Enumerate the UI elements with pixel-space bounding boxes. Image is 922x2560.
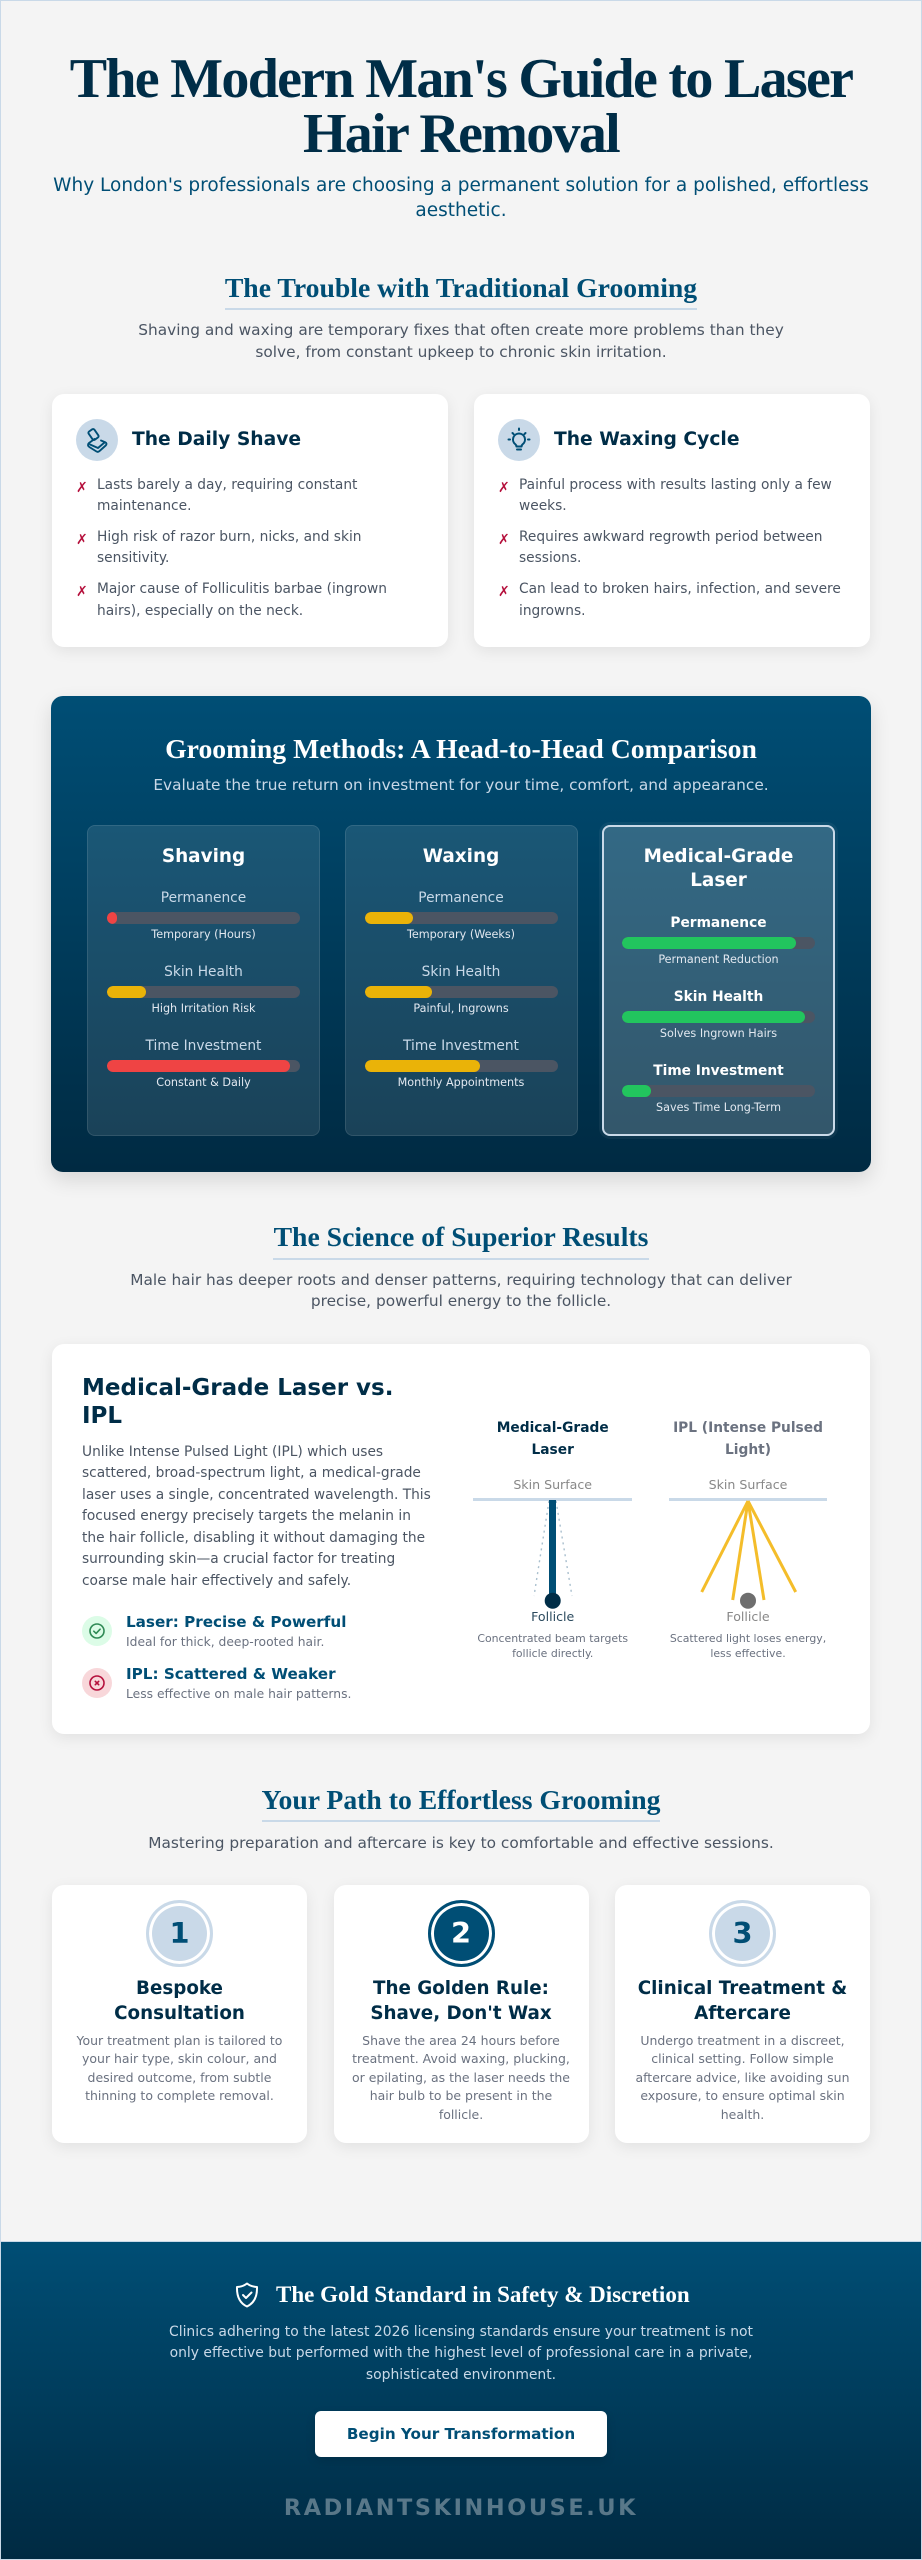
bullet: ✗ [76,480,88,496]
metric: time investment [365,1038,558,1089]
diagram caption: follicle directly. [512,1647,593,1660]
subtitle: aesthetic. [415,200,507,221]
skin surface: Skin Surface [513,1477,592,1492]
metric: skin health: Solves Ingrown Hairs [660,1027,777,1040]
column title: Waxing [423,846,499,866]
bullet: High risk of razor burn, nicks, and skin [97,529,361,545]
step text: treatment. Avoid waxing, plucking, [352,2051,570,2066]
step text: Your treatment plan is tailored to [77,2033,282,2048]
point text [126,1612,346,1648]
bullet: Can lead to broken hairs, infection, and severe [519,581,841,597]
bullet: hairs), especially on the neck. [97,603,303,619]
step title: Shave, Don't Wax [370,2003,552,2024]
point text [126,1664,351,1700]
column title: Laser [690,870,747,891]
footer text: Clinics adhering to the latest 2026 licensing standards ensure your treatment is not [169,2324,753,2340]
panel: laser vs IPL [52,1344,870,1734]
button [315,2411,607,2457]
metric: permanence: Temporary (Weeks) [407,928,515,941]
diagram: IPL [669,1420,827,1660]
step title [370,1978,552,2024]
diagram title: Medical-Grade [497,1420,609,1436]
card title: The Daily Shave [132,429,301,450]
metric: permanence: Permanence [161,890,246,906]
explanation text: coarse male hair effectively and safely. [82,1573,351,1589]
bullet [76,581,387,619]
step text: exposure, to ensure optimal skin [640,2088,845,2103]
metric: skin health: Skin Health [674,989,763,1005]
metric: permanence: Temporary (Hours) [151,928,256,941]
card title: The Waxing Cycle [554,429,740,450]
metric: time investment [107,1038,300,1089]
heading: path to effortless grooming: Your Path to Effortless Grooming [262,1784,660,1815]
point text: IPL: Scattered & Weaker [126,1664,336,1682]
point: IPL [82,1664,351,1700]
comparison heading: Grooming Methods: A Head-to-Head Comparison [165,733,757,764]
bullet: Lasts barely a day, requiring constant [97,477,357,493]
bullet [76,529,361,566]
panel: the waxing cycle [474,394,870,647]
point: laser [82,1612,346,1648]
subtitle: Why London's professionals are choosing a permanent solution for a polished, effortless [53,175,869,196]
step text [76,2033,282,2103]
laser beam [549,1500,556,1598]
metric: skin health [365,964,558,1015]
point text: Ideal for thick, deep-rooted hair. [126,1634,324,1648]
step number [428,1900,494,1967]
step number: 2 [451,1916,471,1950]
step number [709,1900,776,1967]
step title: The Golden Rule: [373,1978,549,1999]
step title [114,1978,245,2024]
diagram title [497,1420,609,1458]
bullet: Requires awkward regrowth period between [519,529,822,545]
step number [146,1900,213,1967]
explanation text: surrounding skin—a crucial factor for treating [82,1551,395,1567]
point text: Laser: Precise & Powerful [126,1612,346,1630]
panel heading: IPL [82,1403,122,1429]
comparison intro: Evaluate the true return on investment for your time, comfort, and appearance. [153,776,769,794]
bullet: ✗ [76,532,88,548]
diagram caption: Concentrated beam targets [477,1632,628,1645]
metric: time investment: Time Investment [653,1063,784,1079]
section intro: trouble: solve, from constant upkeep to chronic skin irritation. [255,342,667,360]
column title [644,846,793,891]
section intro: science: Male hair has deeper roots and denser patterns, requiring technology that can deliver [130,1270,792,1288]
point text: Less effective on male hair patterns. [126,1686,351,1700]
step text: or epilating, as the laser needs the [352,2070,570,2085]
diagram title [673,1420,823,1458]
step title: Consultation [114,2003,245,2024]
step text: follicle. [439,2107,483,2122]
step text: clinical setting. Follow simple [651,2051,834,2066]
panel: head-to-head comparison [51,696,871,1172]
step text: thinning to complete removal. [85,2088,274,2103]
brand: RADIANTSKINHOUSE.UK [284,2495,638,2521]
metric: permanence [107,890,300,941]
icon: check [82,1616,112,1646]
section intro: trouble: Shaving and waxing are temporary fixes that often create more problems than they [138,321,784,339]
title: Hair Removal [303,103,619,165]
panel: the daily shave [52,394,448,647]
icon: cross [82,1668,112,1698]
bullet: ingrowns. [519,603,586,619]
metric: time investment: Time Investment [403,1038,519,1054]
step title: Bespoke [136,1978,223,1999]
footer text: only effective but performed with the highest level of professional care in a private, [170,2345,752,2361]
bullet: Major cause of Folliculitis barbae (ingrown [97,581,387,597]
explanation text: scattered, broad-spectrum light, a medical-grade [82,1465,421,1481]
section intro: trouble [138,321,784,360]
title [70,48,853,165]
panel: step 3 [615,1885,870,2143]
title: The Modern Man's Guide to Laser [70,48,852,110]
metric: time investment: Monthly Appointments [398,1076,524,1089]
step title: Clinical Treatment & [638,1978,847,1999]
skin surface [473,1477,632,1501]
step text: hair bulb to be present in the [370,2088,552,2103]
diagram caption: Scattered light loses energy, [670,1632,826,1645]
metric: time investment: Saves Time Long-Term [656,1101,781,1114]
bullet [498,477,832,514]
metric: permanence [365,890,558,941]
footer heading: The Gold Standard in Safety & Discretion [276,2282,690,2307]
step number: 1 [169,1916,190,1950]
panel heading [82,1375,393,1429]
metric: time investment: Time Investment [146,1038,261,1054]
heading: science of superior results: The Science of Superior Results [274,1221,648,1252]
scatter guides [534,1501,572,1596]
icon: shield [236,2282,258,2308]
section intro: path: Mastering preparation and aftercare is key to comfortable and effective sessions. [148,1834,774,1852]
bullet: maintenance. [97,498,191,514]
panel: step 2 [334,1885,588,2143]
bullet: ✗ [498,480,510,496]
footer text [169,2324,753,2383]
diagram title: Light) [725,1442,771,1458]
step text: desired outcome, from subtle [88,2070,271,2085]
diagram caption: less effective. [710,1647,786,1660]
follicle: Follicle [726,1609,770,1624]
scattered light rays [702,1501,796,1600]
diagram title: Laser [532,1442,574,1458]
metric: permanence: Permanence [670,915,767,931]
subtitle [53,175,869,221]
metric: time investment [622,1063,815,1114]
step text: Shave the area 24 hours before [362,2033,560,2048]
step title [638,1978,847,2024]
step text: Undergo treatment in a discreet, [640,2033,845,2048]
explanation text: Unlike Intense Pulsed Light (IPL) which uses [82,1444,383,1460]
step number: 3 [732,1916,753,1950]
metric: skin health: Skin Health [164,964,243,980]
bullet: ✗ [498,532,510,548]
button: Begin Your Transformation [347,2425,575,2443]
panel heading: Medical-Grade Laser vs. [82,1375,393,1401]
step text [352,2033,570,2122]
bullet: sensitivity. [97,550,169,566]
heading: trouble with traditional grooming: The Trouble with Traditional Grooming [225,272,697,303]
metric: skin health: High Irritation Risk [151,1002,256,1015]
bullet: ✗ [498,584,510,600]
column title: Shaving [162,846,245,866]
icon: razor [76,419,118,461]
bullet: ✗ [76,584,88,600]
icon: light bulb [498,419,540,461]
diagram: medical-grade laser [473,1420,632,1660]
diagram caption [477,1632,628,1660]
metric: permanence [622,915,815,966]
bullet [498,581,841,619]
panel: step 1 [52,1885,307,2143]
step text: your hair type, skin colour, and [82,2051,277,2066]
metric: permanence: Permanence [418,890,504,906]
panel: footer [0,2241,922,2560]
explanation text: focused energy precisely targets the melanin in [82,1508,411,1524]
follicle: Follicle [531,1609,575,1624]
bullet: weeks. [519,498,567,514]
diagram title: IPL (Intense Pulsed [673,1420,823,1436]
explanation text [82,1444,431,1589]
metric: skin health: Skin Health [422,964,500,980]
column: shaving [87,825,320,1136]
bullet [76,477,358,514]
step title: Aftercare [694,2003,791,2024]
metric: skin health [622,989,815,1040]
diagram caption [670,1632,826,1660]
step text: health. [721,2107,764,2122]
metric: skin health [107,964,300,1015]
skin surface [669,1477,827,1501]
section intro: science [130,1270,792,1310]
column title: Medical-Grade [644,846,793,866]
metric: skin health: Painful, Ingrowns [413,1002,509,1015]
bullet [498,529,822,566]
column: waxing [344,825,578,1136]
skin surface: Skin Surface [709,1477,788,1492]
bullet: sessions. [519,550,581,566]
section intro: science: precise, powerful energy to the follicle. [311,1292,611,1310]
explanation text: laser uses a single, concentrated wavelength. This [82,1487,431,1503]
follicle [531,1593,575,1624]
follicle [726,1593,770,1624]
step text [636,2033,849,2122]
metric: time investment: Constant & Daily [156,1076,251,1089]
bullet: Painful process with results lasting only a few [519,477,832,493]
footer text: sophisticated environment. [366,2367,556,2383]
metric: permanence: Permanent Reduction [658,953,779,966]
explanation text: the hair follicle, disabling it without damaging the [82,1530,425,1546]
step text: aftercare advice, like avoiding sun [636,2070,849,2085]
column: medical-grade laser [602,825,835,1136]
